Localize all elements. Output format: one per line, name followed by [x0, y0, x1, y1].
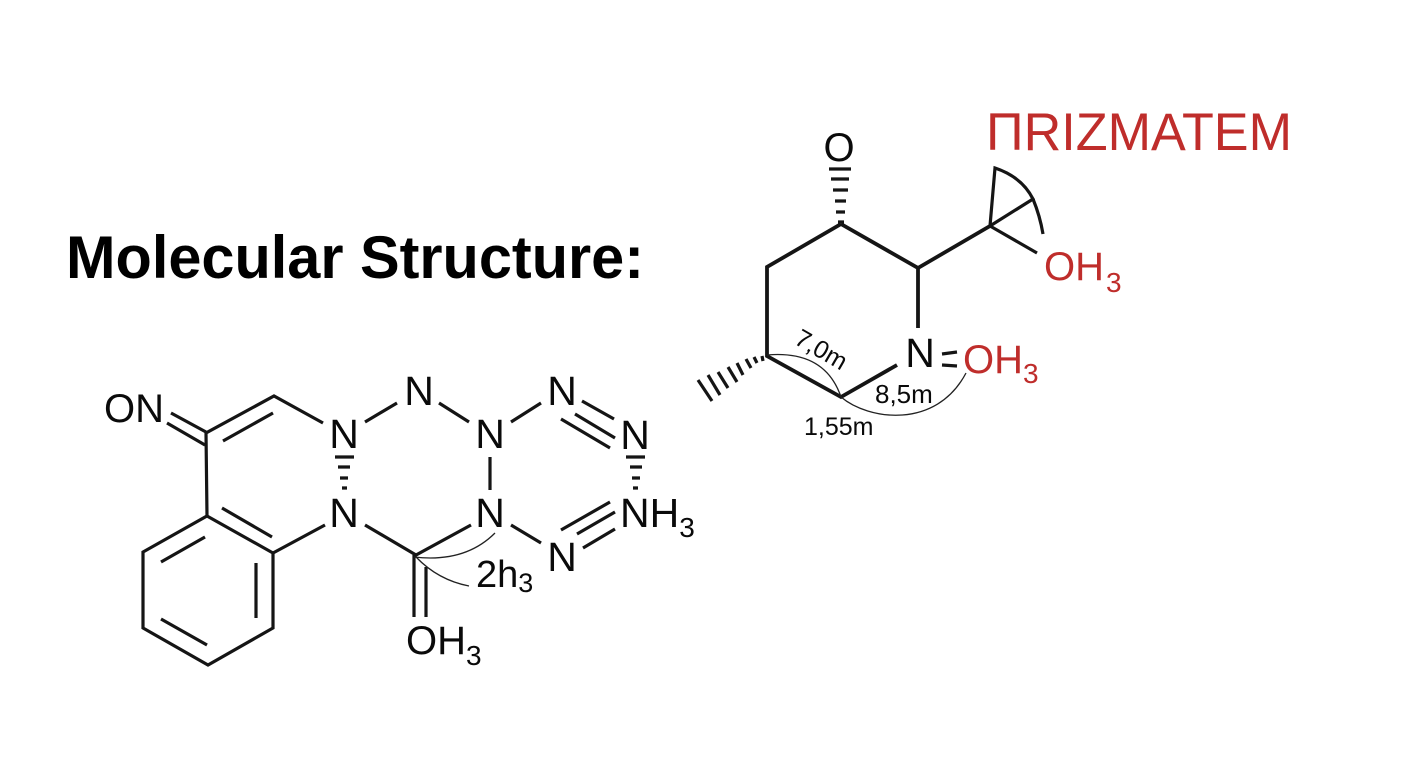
title: Molecular Structure: Molecular Structure: [66, 224, 644, 291]
atom labels nitrogen: N [547, 534, 577, 580]
measurement 1,55m: 1,55m [804, 413, 873, 441]
measurement 8,5m: 8,5m [875, 379, 933, 409]
chart: left molecule structure [104, 368, 695, 671]
upper ring bonds [167, 396, 615, 617]
red label OH3 lower: OH [963, 338, 1023, 382]
atom labels nitrogen: N [475, 411, 505, 457]
atom labels nitrogen: N [404, 368, 434, 414]
atom label OH3: OH [406, 619, 466, 663]
atom labels nitrogen: N [475, 490, 505, 536]
double bond to OH3 [942, 352, 957, 366]
hashed bond N to N [335, 457, 354, 488]
hashed bond N to NH3 [626, 457, 645, 488]
annotation 2h3: 2h [476, 554, 518, 596]
atom labels nitrogen: N [329, 490, 359, 536]
chart: right molecule structure [698, 126, 1122, 441]
annotation 2h3: 3 [518, 568, 533, 598]
atom label ON: ON [104, 387, 164, 431]
measurement 7,0m: 7,0m [790, 324, 852, 376]
atom labels nitrogen: N [329, 411, 359, 457]
atom label NH3: NH [620, 490, 679, 536]
benzene ring [143, 508, 273, 665]
hashed wedge to oxygen [829, 169, 851, 222]
red label OH3 upper: OH [1044, 245, 1104, 289]
atom label O: O [823, 126, 855, 170]
ring bonds [767, 224, 990, 397]
atom labels nitrogen: N [620, 412, 650, 458]
hashed wedge methyl [698, 356, 763, 401]
atom label N: N [905, 330, 935, 376]
atom label NH3: 3 [679, 512, 695, 543]
atom label OH3: 3 [466, 640, 482, 671]
red label OH3 lower: 3 [1023, 358, 1039, 389]
red label OH3 upper: 3 [1106, 267, 1122, 298]
measurement arcs [767, 355, 966, 415]
cyclopropane group [990, 168, 1043, 253]
heading: red compound name: ΠRIZMATEM [986, 103, 1292, 162]
atom labels nitrogen: N [547, 368, 577, 414]
atom labels nitrogen [329, 368, 650, 580]
annotation arcs [414, 533, 495, 586]
